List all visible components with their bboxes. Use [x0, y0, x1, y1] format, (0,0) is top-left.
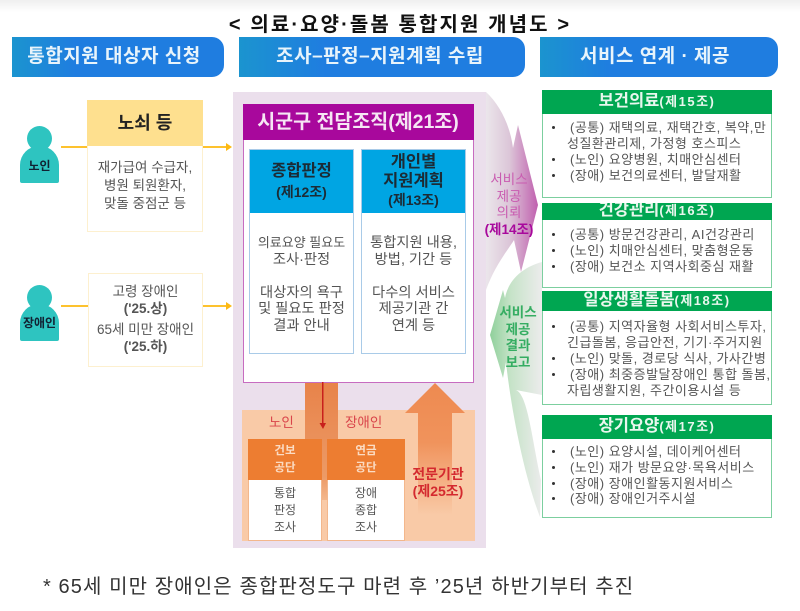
label: service request: (제14조)	[485, 222, 533, 236]
box: health insurance service	[248, 439, 322, 541]
box: disabled	[88, 273, 203, 367]
card list: (노인) 요양시설, 데이케어센터	[570, 444, 742, 459]
label: service report: 제공	[506, 322, 530, 336]
column text: 다수의 서비스	[372, 284, 455, 300]
box: seniors	[87, 100, 203, 232]
label: service report: 결과	[506, 338, 530, 353]
card list: (공통) 방문건강관리, AI건강관리	[570, 227, 755, 242]
card heading: 보건의료(제15조)	[599, 92, 715, 110]
label: service report: 서비스	[499, 305, 537, 320]
card list: (장애) 보건소 지역사회중심 재활	[570, 259, 754, 274]
column heading: 개인별	[391, 153, 436, 171]
box heading: 공단	[274, 462, 296, 474]
arrow: disabled to assessment	[203, 302, 232, 310]
heading: assessment and planning	[239, 37, 525, 77]
card list: (장애) 장애인활동지원서비스	[570, 476, 733, 491]
label: service request: 의뢰	[497, 205, 521, 220]
column heading: (제12조)	[276, 184, 327, 200]
column text: 조사·판정	[273, 252, 330, 268]
connector: disabled to box	[61, 305, 89, 307]
label: service request: 서비스	[490, 172, 528, 187]
panel: assessment background	[233, 92, 486, 548]
panel: long-term care services	[542, 415, 772, 518]
flow arrows: request and report	[486, 92, 542, 516]
icon: disabled person: 장애인	[23, 316, 56, 330]
column text: 결과 안내	[273, 318, 330, 334]
card heading	[542, 415, 772, 439]
card heading	[542, 203, 772, 220]
box text: 조사	[274, 520, 296, 534]
column: comprehensive assessment	[249, 149, 354, 354]
label: service report	[499, 305, 537, 370]
card list: (공통) 지역자율형 사회서비스투자,	[570, 319, 766, 334]
card list: 성질환관리제, 가정형 호스피스	[567, 136, 741, 151]
panel: daily living care services	[542, 291, 772, 405]
footnote: * 65세 미만 장애인은 종합판정도구 마련 후 ’25년 하반기부터 추진	[43, 576, 634, 598]
arrow: service result report	[490, 262, 542, 517]
column heading: 지원계획	[383, 172, 444, 190]
heading: applicants: 통합지원 대상자 신청	[27, 46, 201, 67]
seniors heading: 노쇠 등	[118, 113, 172, 133]
heading: assessment and planning: 조사–판정–지원계획 수립	[276, 46, 484, 67]
box text: 종합	[355, 503, 377, 517]
heading: service delivery	[540, 37, 778, 77]
box text	[248, 480, 322, 541]
title: < 의료·요양·돌봄 통합지원 개념도 >	[229, 14, 571, 36]
column heading: (제13조)	[388, 192, 439, 208]
column: individual support plan	[361, 149, 466, 354]
box text: 판정	[274, 503, 296, 517]
column text	[258, 235, 345, 334]
column text: 및 필요도 판정	[258, 301, 345, 317]
heading: service delivery: 서비스 연계 · 제공	[580, 46, 730, 67]
heading: applicants	[12, 37, 224, 77]
arrow: up to organization	[405, 383, 465, 507]
card heading: 일상생활돌봄(제18조)	[583, 291, 731, 309]
box text: 조사	[355, 520, 377, 534]
box heading: 공단	[355, 462, 377, 474]
box text: 통합	[274, 486, 296, 500]
column text: 의료요양 필요도	[258, 235, 345, 250]
label: disabled: 장애인	[345, 415, 382, 430]
column heading	[362, 150, 465, 213]
seniors heading	[87, 100, 203, 146]
column heading: 종합판정	[271, 162, 332, 180]
label: service request: 제공	[497, 188, 521, 204]
box text: 장애	[355, 486, 377, 500]
icon: disabled person	[20, 285, 59, 341]
panel: applicants	[20, 100, 232, 367]
card list: (장애) 최중증발달장애인 통합 돌봄,	[570, 367, 771, 382]
connector band	[305, 383, 338, 500]
seniors description: 재가급여 수급자,	[98, 160, 192, 175]
card list	[552, 120, 766, 151]
organization heading	[242, 104, 474, 140]
column text: 방법, 기간 등	[375, 252, 452, 268]
icon: senior person: 노인	[28, 159, 51, 173]
card list: (장애) 보건의료센터, 발달재활	[570, 168, 742, 183]
label: specialist institution: 전문기관	[412, 466, 464, 482]
seniors description	[98, 160, 192, 211]
label: specialist institution: (제25조)	[413, 483, 463, 499]
panel: specialist institutions	[242, 410, 475, 541]
column text: 제공기관 간	[379, 301, 448, 317]
column text	[370, 235, 457, 334]
box: pension service	[327, 439, 405, 541]
connector: senior to box	[61, 146, 87, 148]
panel: local dedicated organization	[243, 104, 474, 383]
arrow: seniors to assessment	[203, 143, 232, 151]
arrow: service request	[486, 92, 538, 290]
card list: 긴급돌봄, 응급안전, 기기·주거지원	[567, 335, 763, 350]
card list: (공통) 재택의료, 재택간호, 복약,만	[570, 120, 766, 135]
box heading: 연금	[355, 445, 377, 457]
column heading	[250, 150, 353, 213]
organization heading: 시군구 전담조직(제21조)	[257, 110, 459, 132]
box heading	[248, 439, 322, 480]
box heading	[327, 439, 405, 480]
card list: (노인) 맞돌, 경로당 식사, 가사간병	[570, 351, 766, 366]
card list: (노인) 치매안심센터, 맞춤형운동	[570, 243, 754, 258]
card list: (노인) 요양병원, 치매안심센터	[570, 152, 742, 167]
label: service report: 보고	[506, 354, 530, 370]
card list: 자립생활지원, 주간이용시설 등	[567, 383, 741, 398]
panel: health management services	[542, 203, 772, 288]
card list: (장애) 장애인거주시설	[570, 491, 696, 506]
label: seniors: 노인	[269, 415, 294, 430]
card list	[552, 319, 766, 350]
column text: 연계 등	[392, 318, 435, 334]
card heading	[542, 291, 772, 311]
seniors description: 병원 퇴원환자,	[104, 178, 186, 193]
icon: senior person	[20, 126, 59, 183]
card heading	[542, 90, 772, 114]
disabled description: ('25.상) 65세 미만 장애인	[97, 301, 194, 337]
box text	[327, 480, 405, 541]
panel: health care services	[542, 90, 772, 198]
seniors description: 맞돌 중점군 등	[104, 196, 186, 211]
card heading: 장기요양(제17조)	[599, 417, 715, 435]
top shading	[0, 0, 800, 12]
label: specialist institution	[412, 466, 464, 499]
column text: 대상자의 욕구	[260, 284, 343, 300]
card list	[552, 367, 771, 398]
disabled description	[97, 284, 194, 354]
disabled description: 고령 장애인	[113, 284, 178, 299]
card list: (노인) 재가 방문요양·목욕서비스	[570, 460, 755, 475]
box heading: 건보	[274, 445, 296, 457]
arrow: down to assessment	[320, 382, 326, 429]
disabled description: ('25.하)	[124, 339, 167, 354]
label: service request	[485, 172, 533, 237]
column text: 통합지원 내용,	[370, 235, 457, 251]
